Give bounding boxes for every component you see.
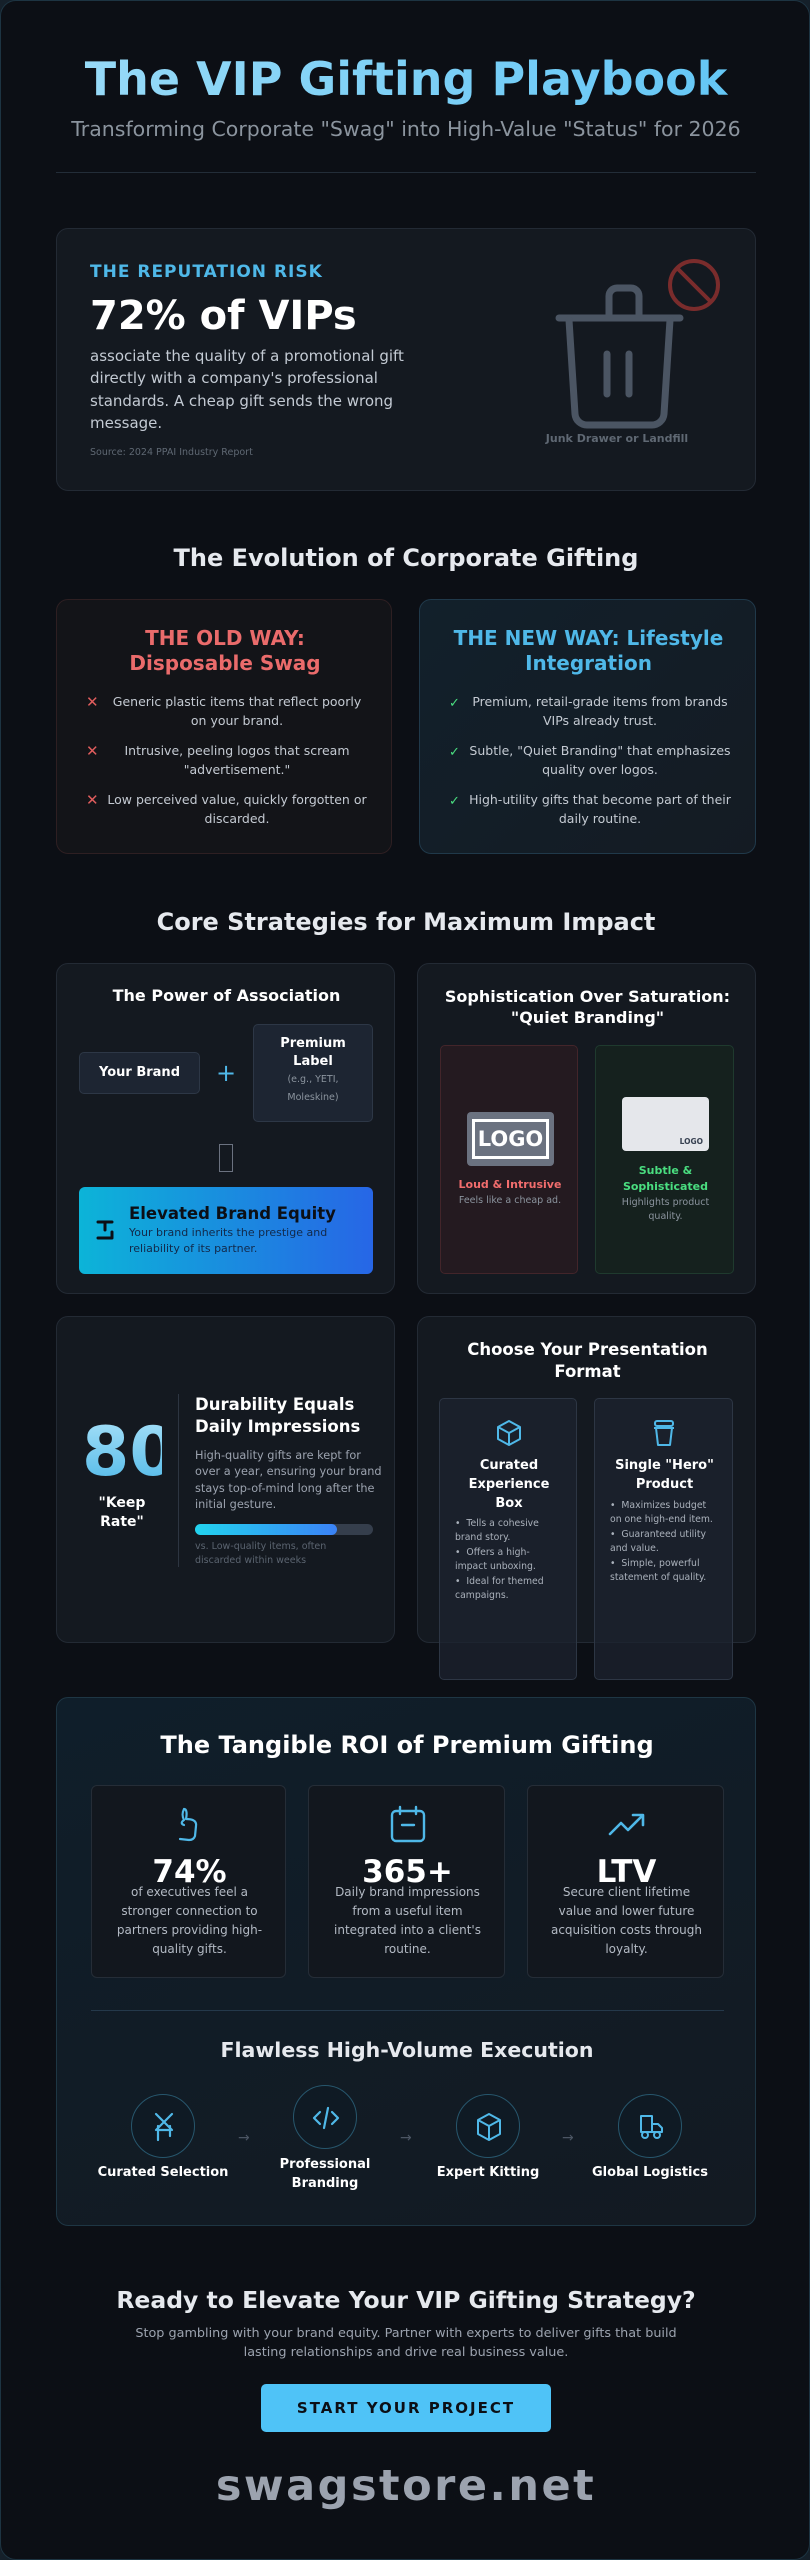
callout: elevated brand equity: Elevated Brand Equity — [129, 1204, 336, 1223]
panel: old way: on your brand. — [191, 713, 283, 728]
panel: old way: Low perceived value, quickly forgotten or — [107, 792, 367, 807]
panel: new way: ✓ — [449, 696, 460, 711]
card: curated experience box: • Tells a cohesive — [455, 1518, 539, 1529]
card: curated experience box: campaigns. — [455, 1590, 509, 1600]
heading: new way: THE NEW WAY: Lifestyle — [454, 626, 723, 650]
card: single hero product: Single "Hero" — [615, 1458, 714, 1473]
process: execution steps: Global Logistics — [592, 2165, 708, 2180]
step: professional branding — [293, 2085, 357, 2149]
panel: old way — [56, 599, 392, 854]
box: your brand: Your Brand — [99, 1065, 180, 1080]
panel: durability: High-quality gifts are kept for — [195, 1449, 361, 1462]
stat card: 365+: Daily brand impressions — [335, 1885, 480, 1899]
icon: plus: + — [216, 1059, 236, 1087]
subtitle: Transforming Corporate "Swag" into High-Value "Status" for 2026 — [71, 117, 741, 141]
icon: calendar — [390, 1806, 426, 1842]
label: reputation risk: THE REPUTATION RISK — [90, 262, 323, 282]
text: reputation body: standards. A cheap gift sends the wrong — [90, 392, 393, 410]
list: new way items — [449, 694, 731, 826]
brand: swagstore.net: swagstore.net — [216, 2461, 596, 2511]
card: single hero product: and value. — [610, 1542, 659, 1554]
card: single hero product: statement of quality. — [610, 1572, 706, 1582]
process: execution steps: Professional — [280, 2157, 370, 2172]
heading: "Quiet Branding" — [511, 1008, 664, 1027]
card: single hero product: Product — [636, 1477, 693, 1492]
box: premium label: Moleskine) — [287, 1092, 339, 1103]
panel: new way: Premium, retail-grade items from brands — [472, 694, 728, 709]
panel: new way: ✓ — [449, 794, 460, 809]
panel: new way: quality over logos. — [542, 762, 658, 777]
box: premium label: (e.g., YETI, — [287, 1074, 339, 1085]
example: loud logo — [440, 1045, 578, 1274]
text: durability: Durability Equals — [195, 1395, 354, 1414]
card: curated experience box: Curated — [480, 1458, 538, 1473]
title: The VIP Gifting Playbook — [85, 52, 727, 106]
stat card: 74%: quality gifts. — [152, 1942, 227, 1956]
panel: new way: ✓ — [449, 745, 460, 760]
callout: elevated brand equity — [79, 1187, 373, 1274]
card: single hero product: • Maximizes budget — [610, 1500, 706, 1511]
card: curated experience box — [439, 1398, 577, 1680]
heading: core strategies: Core Strategies for Maximum Impact — [157, 908, 655, 936]
panel: presentation format: Choose Your Presentation — [467, 1340, 708, 1359]
text: reputation body: directly with a company's professional — [90, 369, 378, 387]
panel: new way — [419, 599, 756, 854]
panel: old way: ✕ — [86, 791, 99, 809]
text: reputation body: message. — [90, 414, 162, 432]
card: curated experience box: impact unboxing. — [455, 1560, 536, 1572]
box: your brand — [79, 1052, 200, 1094]
text: durability: Daily Impressions — [195, 1416, 360, 1436]
icon: trend up — [608, 1814, 644, 1836]
stat card: 74%: 74% — [152, 1854, 227, 1890]
stat card: LTV: loyalty. — [605, 1942, 648, 1956]
stat card: 365+: from a useful item — [352, 1904, 463, 1918]
panel: new way: High-utility gifts that become part of their — [469, 792, 731, 807]
stat card: 365+: 365+ — [362, 1854, 453, 1890]
panel: old way: Intrusive, peeling logos that scream — [124, 743, 350, 758]
box: premium label — [253, 1024, 373, 1122]
card: curated experience box: • Ideal for themed — [455, 1576, 544, 1587]
heading: new way: Integration — [525, 651, 652, 675]
stat card: 365+: integrated into a client's — [334, 1923, 481, 1937]
example: subtle logo: Highlights product — [622, 1197, 709, 1208]
stat card: LTV — [527, 1785, 724, 1978]
panel: durability: initial gesture. — [195, 1498, 276, 1511]
example: subtle logo: Sophisticated — [623, 1180, 708, 1193]
button: start your project: START YOUR PROJECT — [297, 2399, 515, 2417]
icon: cup — [654, 1420, 674, 1446]
panel: new way: Subtle, "Quiet Branding" that emphasizes — [469, 743, 731, 758]
step: expert kitting — [456, 2094, 520, 2158]
panel: old way: discarded. — [205, 811, 269, 826]
icon: missing glyph arrow — [219, 1144, 233, 1172]
card: curated experience box: brand story. — [455, 1532, 510, 1542]
stat card: LTV: value and lower future — [559, 1904, 694, 1918]
heading: The Power of Association — [113, 986, 340, 1005]
heading: old way: Disposable Swag — [129, 651, 321, 675]
stat card: 365+: routine. — [384, 1942, 431, 1956]
icon: transfer — [96, 1220, 114, 1240]
step: global logistics — [618, 2094, 682, 2158]
panel: presentation format: Format — [554, 1362, 621, 1381]
stat card: 74% — [91, 1785, 286, 1978]
panel: quiet branding — [417, 963, 756, 1294]
text: reputation body — [90, 347, 404, 432]
card: single hero product — [594, 1398, 733, 1680]
icon: trash can with no sign — [556, 259, 720, 428]
text: CTA body — [135, 2326, 677, 2360]
panel: durability: stays top-of-mind long after the — [195, 1482, 374, 1495]
heading — [445, 987, 730, 1027]
panel: durability: "Keep — [99, 1495, 145, 1511]
box: premium label: Label — [293, 1054, 333, 1069]
example: loud logo: Feels like a cheap ad. — [459, 1195, 561, 1206]
icon: subtle product: LOGO — [680, 1137, 703, 1146]
panel: old way: ✕ — [86, 693, 99, 711]
caption: junk drawer: Junk Drawer or Landfill — [546, 432, 688, 445]
stat card: LTV: acquisition costs through — [551, 1923, 702, 1937]
stat: 72% of VIPs: 72% of VIPs — [90, 293, 357, 339]
stat card: 74%: stronger connection to — [121, 1904, 258, 1918]
process: execution steps: Curated Selection — [98, 2165, 228, 2180]
example: loud logo: Loud & Intrusive — [459, 1178, 561, 1191]
icon: big logo: LOGO — [478, 1127, 543, 1151]
card: single hero product: • Simple, powerful — [610, 1558, 700, 1569]
card: curated experience box: • Offers a high- — [455, 1547, 530, 1558]
process: execution steps — [98, 2085, 708, 2191]
panel: durability — [56, 1316, 395, 1643]
stat card: 74%: of executives feel a — [131, 1885, 248, 1899]
box: premium label: Premium — [280, 1036, 346, 1051]
process: execution steps: Branding — [292, 2176, 358, 2191]
card: curated experience box: Experience — [469, 1477, 549, 1492]
panel: durability: discarded within weeks — [195, 1554, 306, 1566]
text: durability — [195, 1395, 360, 1436]
panel: old way: Generic plastic items that reflect poorly — [113, 694, 361, 709]
panel: ROI — [56, 1697, 756, 2226]
heading: new way — [454, 626, 723, 675]
arrow: → — [238, 2130, 250, 2146]
panel: reputation risk — [56, 228, 756, 491]
heading: CTA: Ready to Elevate Your VIP Gifting Strategy? — [116, 2286, 696, 2314]
icon: big logo — [467, 1112, 554, 1166]
step: curated selection — [131, 2094, 195, 2158]
example: subtle logo — [595, 1045, 734, 1274]
button: start your project — [261, 2384, 551, 2432]
chart: progress bar — [195, 1524, 373, 1535]
card: curated experience box: Box — [495, 1496, 523, 1511]
heading: Sophistication Over Saturation: — [445, 987, 730, 1006]
process: execution steps: Expert Kitting — [437, 2165, 539, 2180]
panel: new way: VIPs already trust. — [543, 713, 657, 728]
heading: execution: Flawless High-Volume Execution — [220, 2038, 593, 2062]
example: subtle logo: quality. — [648, 1211, 683, 1222]
callout: elevated brand equity: reliability of its partner. — [129, 1242, 257, 1255]
icon: subtle product — [622, 1097, 709, 1151]
icon: thumb — [178, 1808, 198, 1842]
example: subtle logo: Subtle & — [639, 1164, 692, 1177]
heading: ROI: The Tangible ROI of Premium Gifting — [160, 1731, 654, 1759]
text: CTA body: lasting relationships and drive real business value. — [244, 2345, 568, 2360]
text: reputation body: associate the quality of a promotional gift — [90, 347, 404, 365]
icon: cube — [497, 1420, 521, 1446]
panel: old way: "advertisement." — [184, 762, 290, 777]
stat card: 74%: partners providing high- — [117, 1923, 262, 1937]
callout: elevated brand equity: Your brand inherits the prestige and — [129, 1226, 327, 1239]
panel: durability: Rate" — [100, 1514, 144, 1530]
panel: durability: over a year, ensuring your brand — [195, 1465, 382, 1478]
panel: old way: ✕ — [86, 742, 99, 760]
heading: old way: THE OLD WAY: — [145, 626, 305, 650]
panel: power of association — [56, 963, 395, 1294]
stat card: 365+ — [308, 1785, 505, 1978]
text: CTA body: Stop gambling with your brand equity. Partner with experts to deliver gifts that build — [135, 2326, 677, 2341]
heading: old way — [129, 626, 321, 675]
stat card: LTV: Secure client lifetime — [563, 1885, 690, 1899]
panel: durability: vs. Low-quality items, often — [195, 1541, 326, 1552]
card: single hero product: • Guaranteed utility — [610, 1529, 706, 1540]
panel: presentation format — [417, 1316, 756, 1643]
card: single hero product: on one high-end item. — [610, 1514, 713, 1524]
arrow: → — [400, 2130, 412, 2146]
panel: new way: daily routine. — [559, 811, 641, 826]
heading: evolution: The Evolution of Corporate Gifting — [174, 544, 638, 572]
source note: Source: 2024 PPAI Industry Report — [90, 447, 253, 458]
stat card: LTV: LTV — [597, 1854, 656, 1890]
arrow: → — [562, 2130, 574, 2146]
list: old way items — [86, 693, 367, 826]
